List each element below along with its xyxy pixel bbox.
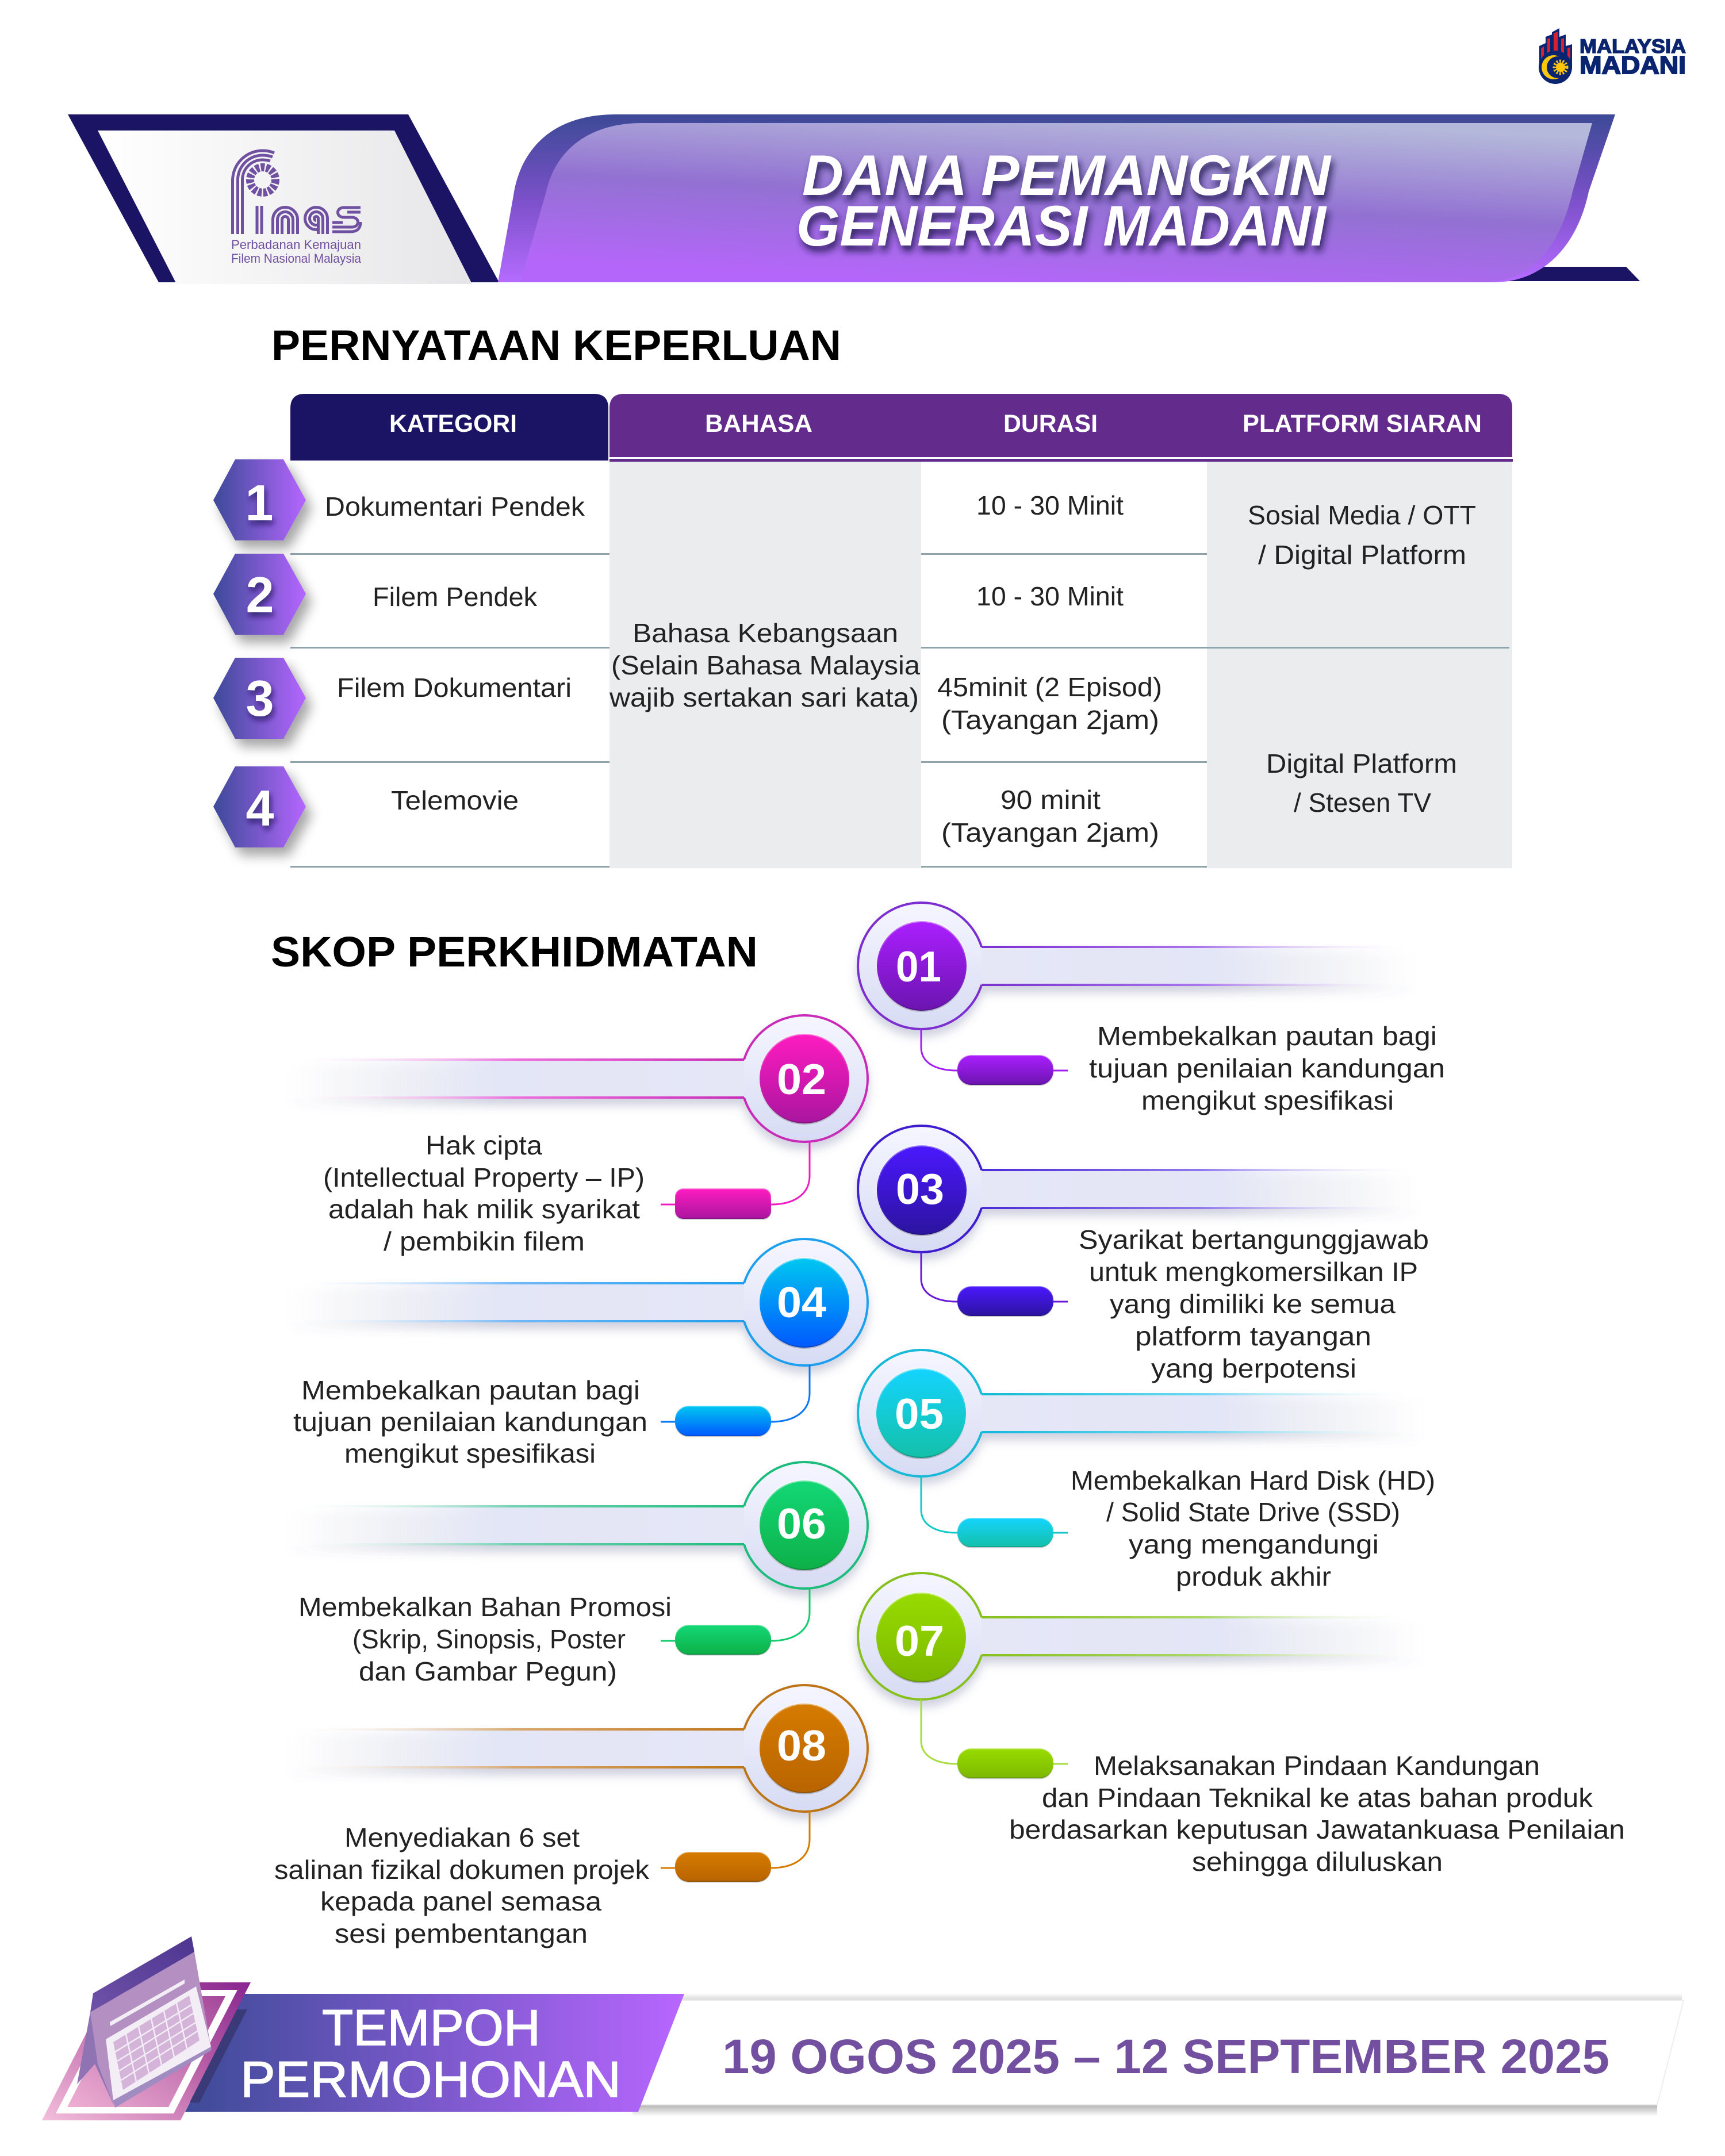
column: bahasa: wajib sertakan sari kata) (609, 682, 919, 712)
column: platform siaran: Digital Platform (1266, 749, 1457, 778)
header banner (68, 114, 1640, 284)
header: purple columns (610, 394, 1513, 462)
description: platform tayangan (1135, 1321, 1371, 1351)
number badge: 01 (896, 942, 941, 991)
step 06 (287, 1462, 868, 1686)
hexagon 1 (213, 459, 306, 540)
number badge (876, 1368, 966, 1458)
description: yang berpotensi (1151, 1353, 1356, 1383)
bar and disc (858, 903, 1414, 1029)
column: bahasa (609, 618, 920, 712)
hexagon 3: 3 (246, 670, 274, 727)
description: Membekalkan pautan bagi (1097, 1021, 1437, 1051)
column: kategori: Telemovie (391, 785, 519, 815)
column: kategori: Dokumentari Pendek (325, 492, 585, 521)
bar and disc (287, 1015, 868, 1142)
table row lines (290, 553, 1509, 868)
step 02 (287, 1015, 868, 1256)
panel: white logo card (98, 131, 472, 284)
description: Hak cipta (425, 1130, 542, 1160)
column: durasi (937, 490, 1162, 847)
number badge (877, 921, 967, 1011)
title (796, 143, 1332, 258)
number badge (877, 1145, 967, 1235)
description (1009, 1751, 1625, 1877)
description: produk akhir (1176, 1562, 1331, 1591)
logo wordmark: MALAYSIA (1580, 36, 1686, 57)
banner label (240, 1999, 621, 2108)
panel: period banner (185, 1994, 684, 2112)
table grey columns (610, 462, 1512, 868)
footer: application period (42, 1936, 1684, 2120)
description: dan Gambar Pegun) (359, 1656, 617, 1686)
column: platform siaran: Sosial Media / OTT (1248, 500, 1476, 530)
description: sehingga diluluskan (1192, 1847, 1443, 1877)
column: durasi: 10 - 30 Minit (976, 581, 1124, 611)
description: dan Pindaan Teknikal ke atas bahan produk (1042, 1783, 1593, 1813)
description: tujuan penilaian kandungan (293, 1407, 647, 1437)
panel: purple title tab (498, 114, 1615, 282)
hexagon 2: 2 (246, 566, 274, 623)
description: kepada panel semasa (320, 1886, 601, 1916)
logo caption: Perbadanan Kemajuan (231, 237, 361, 252)
description: Melaksanakan Pindaan Kandungan (1094, 1751, 1540, 1781)
connector and pill (661, 1365, 810, 1436)
number badge (760, 1034, 849, 1123)
panel: date box (632, 1993, 1684, 2116)
decorative navy strip, right (1495, 267, 1640, 281)
hexagon 4: 4 (246, 780, 274, 837)
header: purple columns: DURASI (1003, 410, 1098, 438)
date text: 19 OGOS 2025 – 12 SEPTEMBER 2025 (722, 2030, 1609, 2084)
column: durasi: 45minit (2 Episod) (937, 672, 1162, 702)
description: mengikut spesifikasi (344, 1438, 596, 1468)
panel: navy frame behind logo (68, 114, 499, 282)
step 07 (858, 1573, 1625, 1877)
logo wordmark (1580, 36, 1686, 79)
logo: Malaysia Madani (1539, 28, 1686, 84)
description: / pembikin filem (384, 1226, 585, 1256)
header: Kategori (290, 394, 608, 461)
step 01 (858, 903, 1445, 1115)
connector and pill (921, 1252, 1068, 1316)
column: platform siaran: / Digital Platform (1258, 540, 1466, 570)
number badge: 08 (777, 1721, 826, 1770)
description: (Intellectual Property – IP) (323, 1163, 645, 1192)
description: Syarikat bertangunggjawab (1079, 1225, 1429, 1255)
connector and pill (661, 1587, 810, 1655)
step 05 (858, 1350, 1435, 1591)
number badge: 06 (777, 1499, 826, 1548)
column: durasi: 90 minit (1000, 785, 1101, 815)
number badge: 04 (777, 1278, 826, 1326)
description: Membekalkan Hard Disk (HD) (1071, 1466, 1435, 1495)
number badge (876, 1593, 966, 1682)
header: Kategori: KATEGORI (389, 410, 517, 438)
column: durasi: 10 - 30 Minit (976, 490, 1124, 520)
column: kategori (325, 492, 585, 815)
hexagon 4 (213, 766, 306, 847)
description: sesi pembentangan (335, 1919, 588, 1948)
heading: Pernyataan Keperluan: PERNYATAAN KEPERLUAN (271, 321, 841, 369)
description (1089, 1021, 1445, 1115)
logo caption (231, 237, 362, 266)
number badge: 02 (777, 1055, 826, 1103)
description: Membekalkan Bahan Promosi (298, 1592, 672, 1622)
bar and disc (287, 1239, 868, 1365)
bar and disc (287, 1685, 868, 1812)
bar and disc (287, 1462, 868, 1589)
column: platform siaran (1248, 500, 1476, 818)
title: DANA PEMANGKIN (802, 143, 1332, 207)
description: Menyediakan 6 set (344, 1823, 580, 1852)
column: bahasa: Bahasa Kebangsaan (632, 618, 898, 648)
description: salinan fizikal dokumen projek (274, 1855, 650, 1885)
number badge: 07 (895, 1617, 944, 1665)
header: purple columns: BAHASA (705, 410, 812, 438)
description: (Skrip, Sinopsis, Poster (352, 1624, 626, 1654)
title: GENERASI MADANI (796, 194, 1327, 258)
step 04 (287, 1239, 868, 1468)
heading: Skop Perkhidmatan: SKOP PERKHIDMATAN (271, 928, 758, 976)
description (1071, 1466, 1435, 1591)
bar and disc (858, 1350, 1423, 1476)
table: requirements (213, 394, 1513, 868)
column: kategori: Filem Dokumentari (337, 673, 572, 703)
description: yang dimiliki ke semua (1110, 1289, 1396, 1319)
banner label: TEMPOH (322, 1999, 540, 2056)
column: durasi: (Tayangan 2jam) (941, 705, 1159, 735)
description: adalah hak milik syarikat (328, 1194, 640, 1224)
hexagon 3 (213, 658, 306, 739)
hexagon 2 (213, 554, 306, 635)
step 08 (274, 1685, 868, 1948)
description: yang mengandungi (1129, 1529, 1379, 1559)
description: tujuan penilaian kandungan (1089, 1053, 1445, 1083)
description: berdasarkan keputusan Jawatankuasa Penilaian (1009, 1814, 1625, 1844)
description: / Solid State Drive (SSD) (1106, 1497, 1400, 1527)
number badge: 03 (896, 1165, 944, 1213)
step 03 (858, 1126, 1429, 1383)
description (274, 1823, 650, 1948)
icon: calendar (42, 1936, 251, 2120)
bar and disc (858, 1573, 1423, 1700)
panel: title tab inner (520, 123, 1592, 282)
number badge (760, 1480, 849, 1570)
description: mengikut spesifikasi (1141, 1085, 1394, 1115)
number badge (760, 1704, 849, 1793)
description (293, 1375, 647, 1468)
header: purple columns: PLATFORM SIARAN (1243, 410, 1482, 438)
description (323, 1130, 645, 1256)
description: untuk mengkomersilkan IP (1089, 1257, 1418, 1287)
description: Membekalkan pautan bagi (301, 1375, 640, 1405)
logo wordmark: MADANI (1580, 51, 1686, 79)
number badge: 05 (895, 1390, 944, 1438)
connector and pill (661, 1141, 810, 1219)
column: bahasa: (Selain Bahasa Malaysia (611, 650, 920, 680)
hexagon 1: 1 (246, 474, 273, 531)
column: kategori: Filem Pendek (373, 582, 538, 612)
banner label: PERMOHONAN (240, 2051, 621, 2108)
icon: stepped bars emblem (1539, 28, 1572, 84)
connector and pill (921, 1700, 1068, 1778)
column: platform siaran: / Stesen TV (1294, 788, 1431, 818)
logo caption: Filem Nasional Malaysia (231, 251, 362, 266)
number badge (760, 1258, 849, 1348)
bar and disc (858, 1126, 1420, 1252)
column: durasi: (Tayangan 2jam) (941, 818, 1159, 847)
connector and pill (921, 1029, 1068, 1085)
description (1079, 1225, 1429, 1383)
connector and pill (921, 1476, 1068, 1547)
logo: FINAS (232, 151, 361, 234)
description (298, 1592, 672, 1686)
connector and pill (661, 1811, 810, 1882)
